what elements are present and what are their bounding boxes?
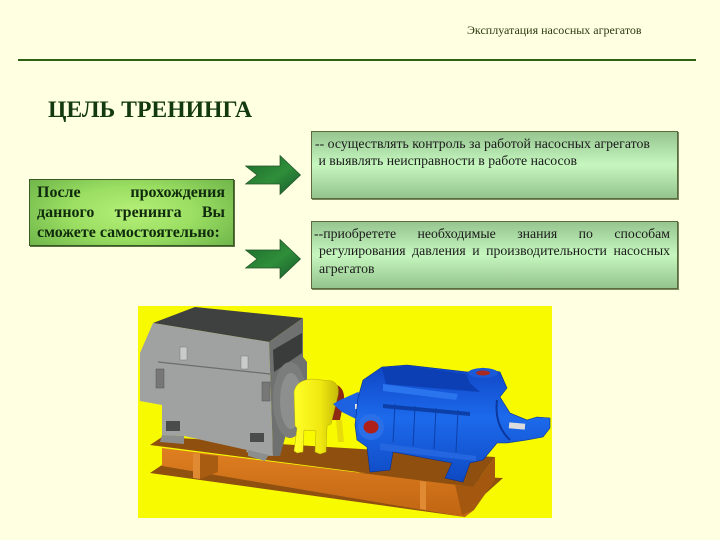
intro text block: [37, 184, 225, 241]
yellow coupling guard: [294, 379, 344, 454]
goal 1 text: -- осуществлять контроль за работой насосных агрегатов: [315, 136, 650, 151]
arrow: to first goal: [245, 155, 301, 195]
goal 2 text: агрегатов: [319, 261, 374, 276]
blue multistage pump: [333, 365, 550, 482]
intro text block: После прохождения: [37, 184, 225, 201]
title: ЦЕЛЬ ТРЕНИНГА: [48, 97, 252, 123]
header rule: [18, 59, 696, 61]
panel: goal 1: [311, 131, 678, 199]
goal 1 text: и выявлять неисправности в работе насосов: [318, 153, 577, 168]
arrow: to second goal: [245, 239, 301, 279]
panel: goal 2: [311, 221, 678, 289]
header: presentation topic: Эксплуатация насосных агрегатов: [467, 23, 642, 37]
panel: intro text: [29, 179, 234, 246]
goal 2 text: регулирования давления и производительности насосных: [319, 243, 670, 258]
base frame: [150, 437, 503, 517]
intro text block: сможете самостоятельно:: [37, 224, 220, 241]
electric motor: [140, 307, 307, 461]
yellow background: [138, 306, 552, 518]
goal 2 text: --приобретете необходимые знания по способам: [314, 226, 670, 241]
goal 2 text: [314, 226, 670, 276]
intro text block: данного тренинга Вы: [37, 204, 225, 221]
goal 1 text: [315, 136, 650, 168]
illustration: pump unit on yellow background: [138, 306, 552, 518]
